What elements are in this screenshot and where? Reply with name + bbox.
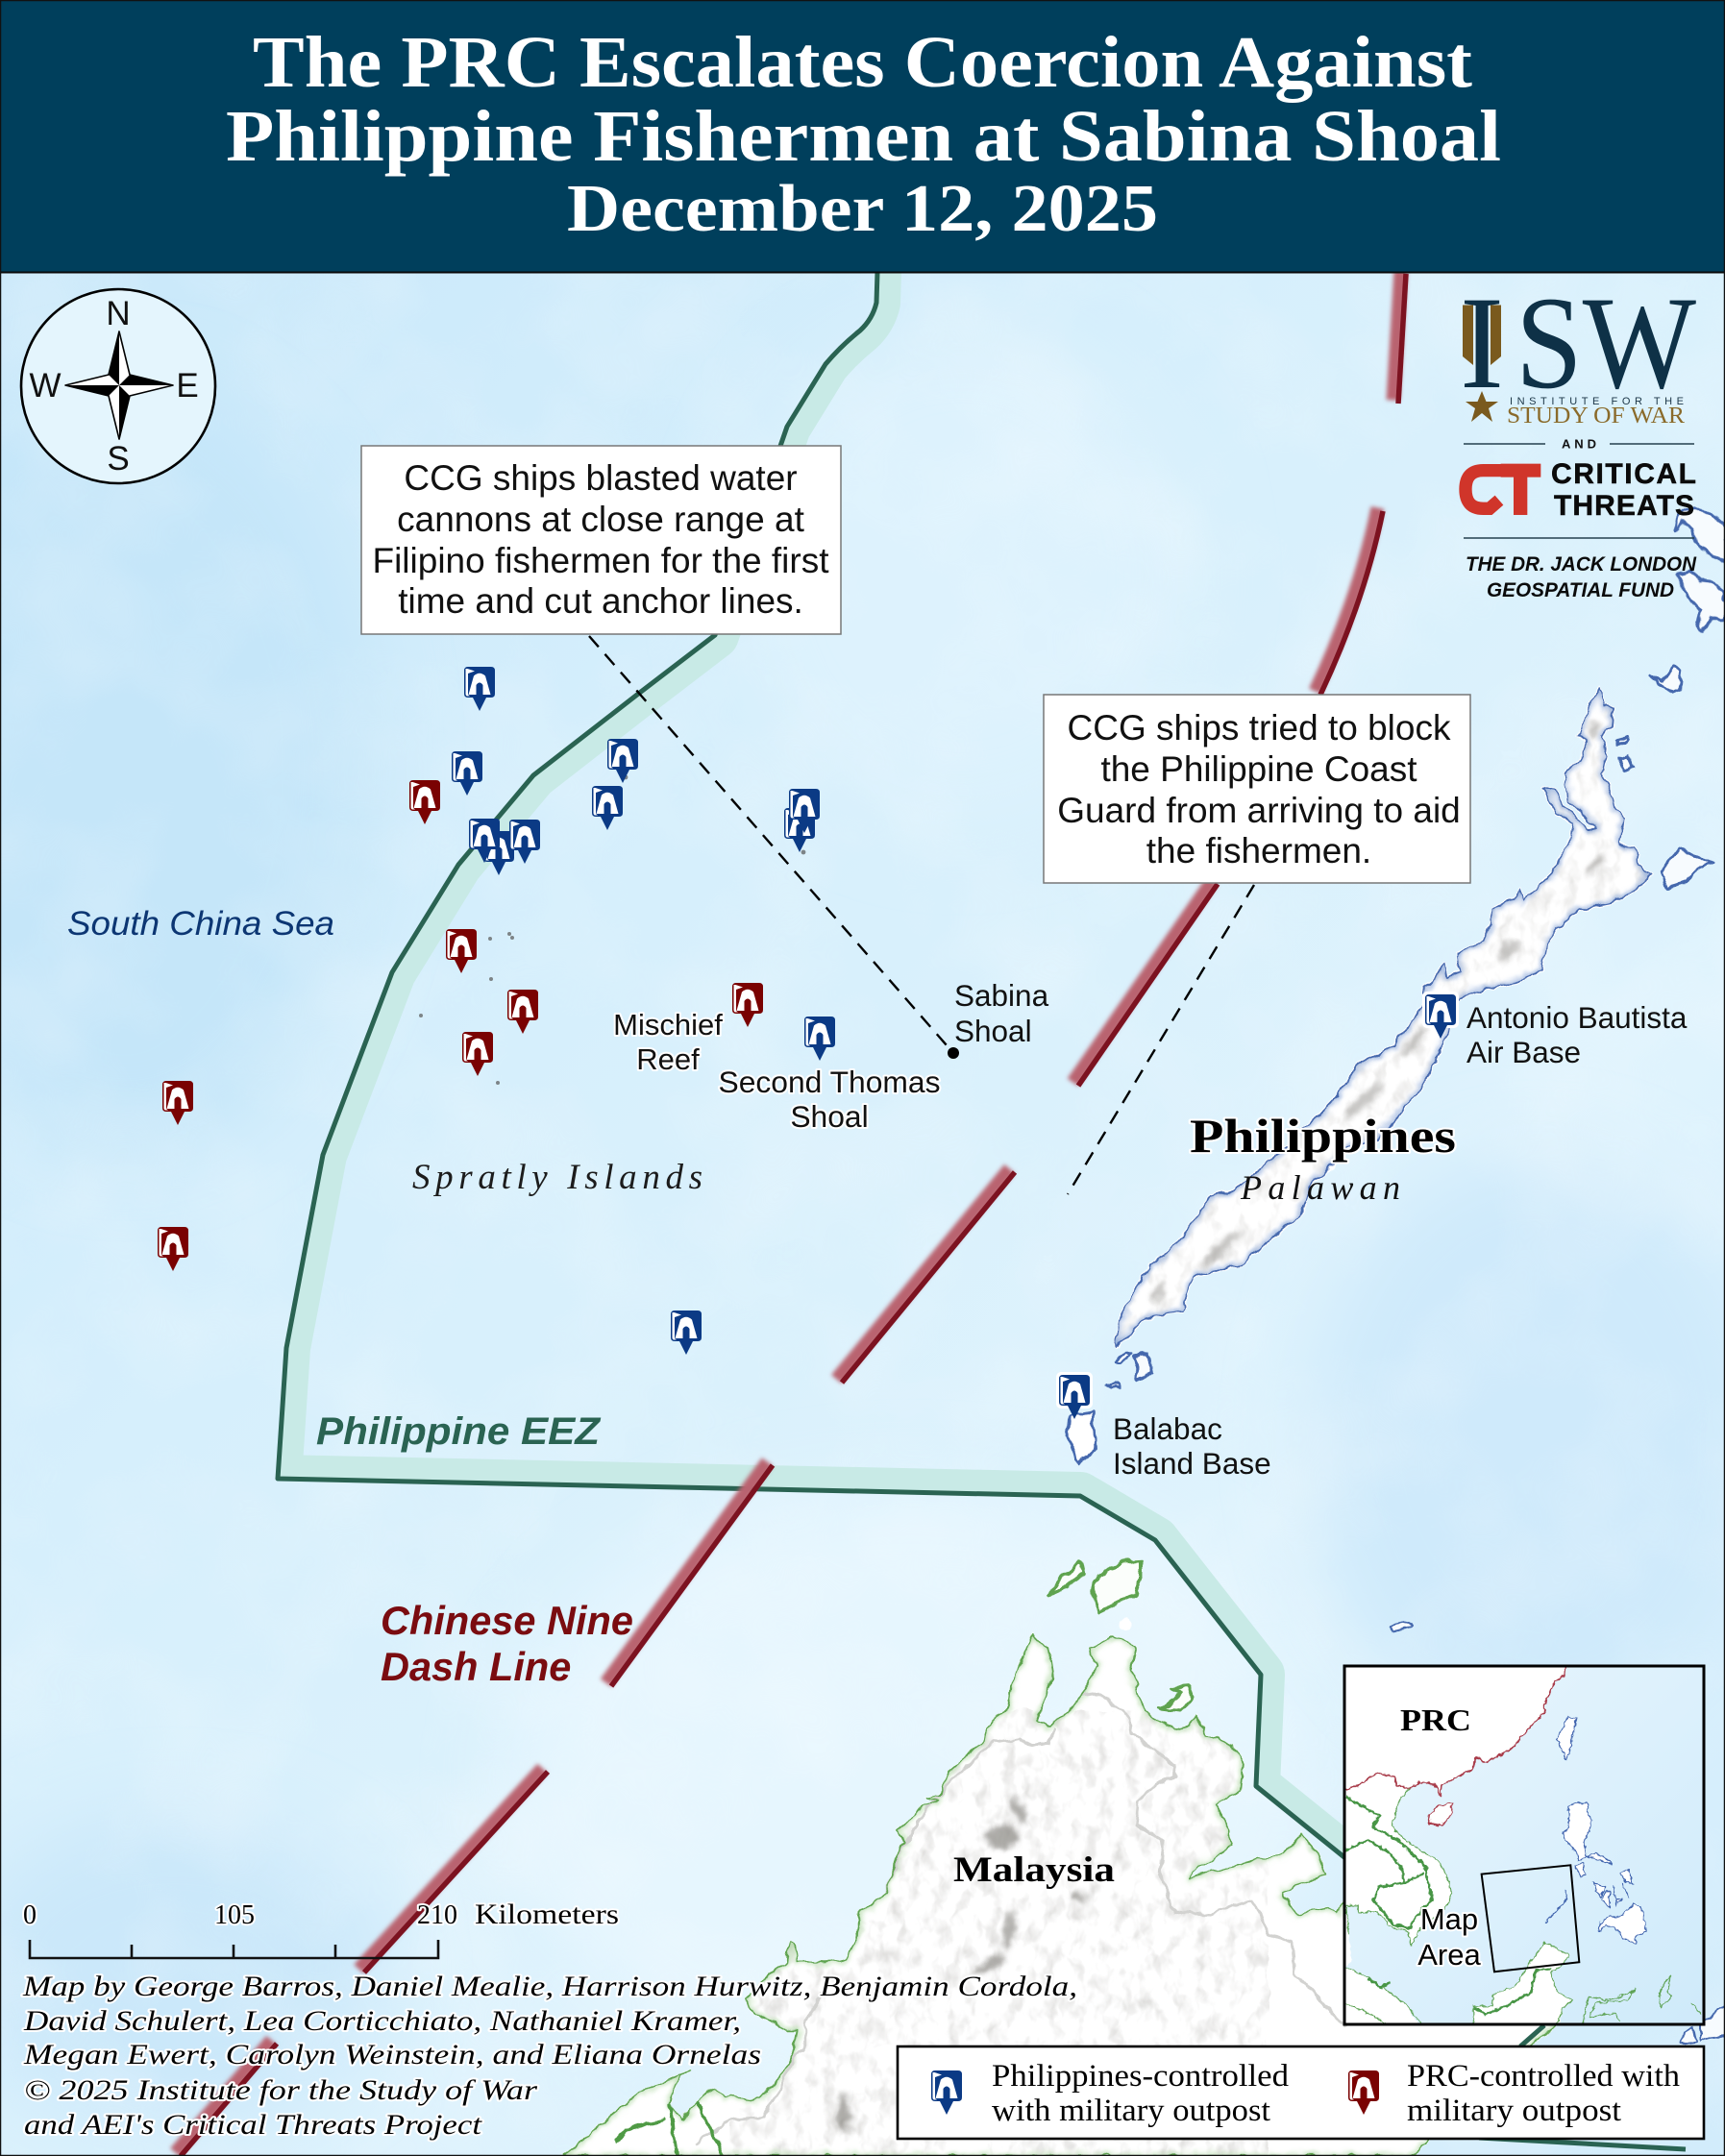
legend — [898, 2046, 1704, 2139]
logo: Institute for the Study of War: SW — [1516, 269, 1696, 416]
label: Balabac Island Base: Island Base — [1113, 1446, 1271, 1481]
label: Second Thomas Shoal: Second Thomas — [719, 1065, 940, 1099]
logo: AND divider: AND — [1562, 436, 1596, 452]
callout: water cannons: cannons at close range at — [397, 500, 805, 539]
dashed leader: Coast Guard callout — [1068, 885, 1254, 1194]
Chinese Nine Dash Line — [175, 271, 1406, 2156]
Hainan — [1429, 1803, 1453, 1825]
Philippines and Taiwan outlines — [1557, 1717, 1646, 1944]
land: Malaysia (Borneo) — [562, 1560, 1557, 2156]
label: Sabina Shoal: Sabina — [954, 978, 1048, 1013]
scale bar — [23, 1899, 619, 1958]
label: Philippines: Philippines — [1190, 1109, 1456, 1163]
header banner — [0, 0, 1725, 273]
China coast — [1344, 1666, 1566, 1797]
label: Balabac Island Base: Balabac — [1113, 1411, 1222, 1446]
Southeast Asia coastline — [1345, 1789, 1451, 1946]
callout: blocked Coast Guard: Guard from arriving to aid — [1057, 791, 1461, 830]
scale bar: 0 — [23, 1900, 37, 1930]
logo: Institute for the Study of War — [1460, 269, 1696, 429]
China land — [1339, 1662, 1568, 1797]
PRC-controlled outposts — [158, 780, 763, 1271]
callout: blocked Coast Guard: CCG ships tried to block — [1068, 708, 1451, 747]
land: small Philippine islands — [1068, 507, 1725, 2045]
map area box — [1482, 1865, 1579, 1972]
legend icon: Philippines-controlled outpost — [931, 2070, 962, 2115]
logo: Critical Threats — [1466, 458, 1696, 522]
scale bar: Kilometers — [475, 1899, 619, 1930]
legend icon: PRC-controlled outpost — [1348, 2070, 1379, 2115]
inset locator map: Area — [1417, 1938, 1481, 1972]
title: The PRC Escalates Coercion Against — [253, 22, 1472, 103]
callout: blocked Coast Guard: the Philippine Coast — [1100, 749, 1417, 789]
label: Palawan: Palawan — [1240, 1168, 1400, 1207]
legend text: Philippines-controlled: with military outpost — [992, 2094, 1270, 2128]
label: South China Sea: South China Sea — [67, 905, 334, 943]
logo: Institute for the Study of War: I — [1460, 269, 1504, 416]
scale bar: 210 — [417, 1900, 457, 1930]
label: Antonio Bautista Air Base: Air Base — [1466, 1035, 1581, 1069]
land: Palawan — [1113, 686, 1654, 1349]
inset locator map: PRC — [1400, 1703, 1471, 1737]
label: Sabina Shoal: Shoal — [954, 1014, 1032, 1048]
compass rose: N — [106, 295, 131, 332]
logo: Institute for the Study of War: INSTITUTE FOR THE — [1510, 396, 1684, 407]
compass rose — [21, 289, 215, 483]
callout: water cannons: time and cut anchor lines. — [398, 581, 803, 621]
mainland Southeast Asia land — [1339, 1774, 1451, 2030]
inset locator map — [1339, 1662, 1704, 2030]
logo: The Dr. Jack London Geospatial Fund: GEOSPATIAL FUND — [1487, 579, 1674, 601]
label: Spratly Islands: Spratly Islands — [412, 1158, 702, 1197]
Borneo land — [1474, 1945, 1572, 2023]
legend text: Philippines-controlled: Philippines-controlled — [992, 2059, 1290, 2094]
Philippine EEZ inner halo — [278, 272, 1345, 1858]
credits: Megan Ewert, Carolyn Weinstein, and Eliana Ornelas — [23, 2039, 761, 2070]
label: Philippine EEZ: Philippine EEZ — [316, 1410, 602, 1453]
credits: Map by George Barros, Daniel Mealie, Harrison Hurwitz, Benjamin Cordola, — [22, 1971, 1077, 2002]
logo: The Dr. Jack London Geospatial Fund: THE DR. JACK LONDON — [1466, 553, 1697, 576]
credits: © 2025 Institute for the Study of War — [24, 2074, 537, 2106]
title: Philippine Fishermen at Sabina Shoal — [226, 96, 1501, 177]
credits: and AEI's Critical Threats Project — [24, 2109, 482, 2141]
logo: Critical Threats: CRITICAL — [1551, 458, 1696, 490]
label: Second Thomas Shoal: Shoal — [790, 1099, 869, 1134]
label: Malaysia: Malaysia — [953, 1850, 1115, 1890]
label: Mischief Reef: Reef — [636, 1042, 700, 1076]
thick land borders — [1345, 1797, 1550, 2015]
scale bar: 105 — [214, 1900, 255, 1930]
callout: water cannons: Filipino fishermen for the first — [372, 541, 829, 580]
compass rose: E — [176, 367, 199, 404]
callout: water cannons: CCG ships blasted water — [404, 458, 798, 498]
label: Chinese Nine Dash Line: Chinese Nine — [381, 1598, 633, 1643]
compass rose: S — [107, 440, 130, 478]
Philippines-controlled outposts — [452, 667, 1459, 1419]
credits: David Schulert, Lea Corticchiato, Nathaniel Kramer, — [23, 2005, 741, 2037]
logo: Institute for the Study of War: STUDY OF WAR — [1507, 404, 1685, 429]
legend text: PRC-controlled: military outpost — [1407, 2094, 1621, 2128]
inset locator map: Map — [1420, 1902, 1478, 1936]
legend text: PRC-controlled: PRC-controlled with — [1407, 2059, 1681, 2094]
dashed leader: Sabina Shoal callout — [589, 636, 959, 1059]
logo: Critical Threats: THREATS — [1554, 490, 1694, 522]
callout: blocked Coast Guard: the fishermen. — [1146, 831, 1371, 870]
label: Mischief Reef: Mischief — [613, 1008, 723, 1041]
reef specks — [419, 775, 805, 1085]
Philippine EEZ line — [278, 272, 1686, 2149]
compass rose: W — [29, 367, 62, 404]
callout: blocked Coast Guard — [1044, 695, 1470, 883]
label: Antonio Bautista Air Base: Antonio Bautista — [1466, 1000, 1687, 1035]
label: Chinese Nine Dash Line: Dash Line — [381, 1644, 571, 1689]
title: December 12, 2025 — [567, 172, 1158, 246]
callout: water cannons — [361, 446, 841, 634]
Borneo and Indonesia outlines — [1473, 1943, 1701, 2024]
